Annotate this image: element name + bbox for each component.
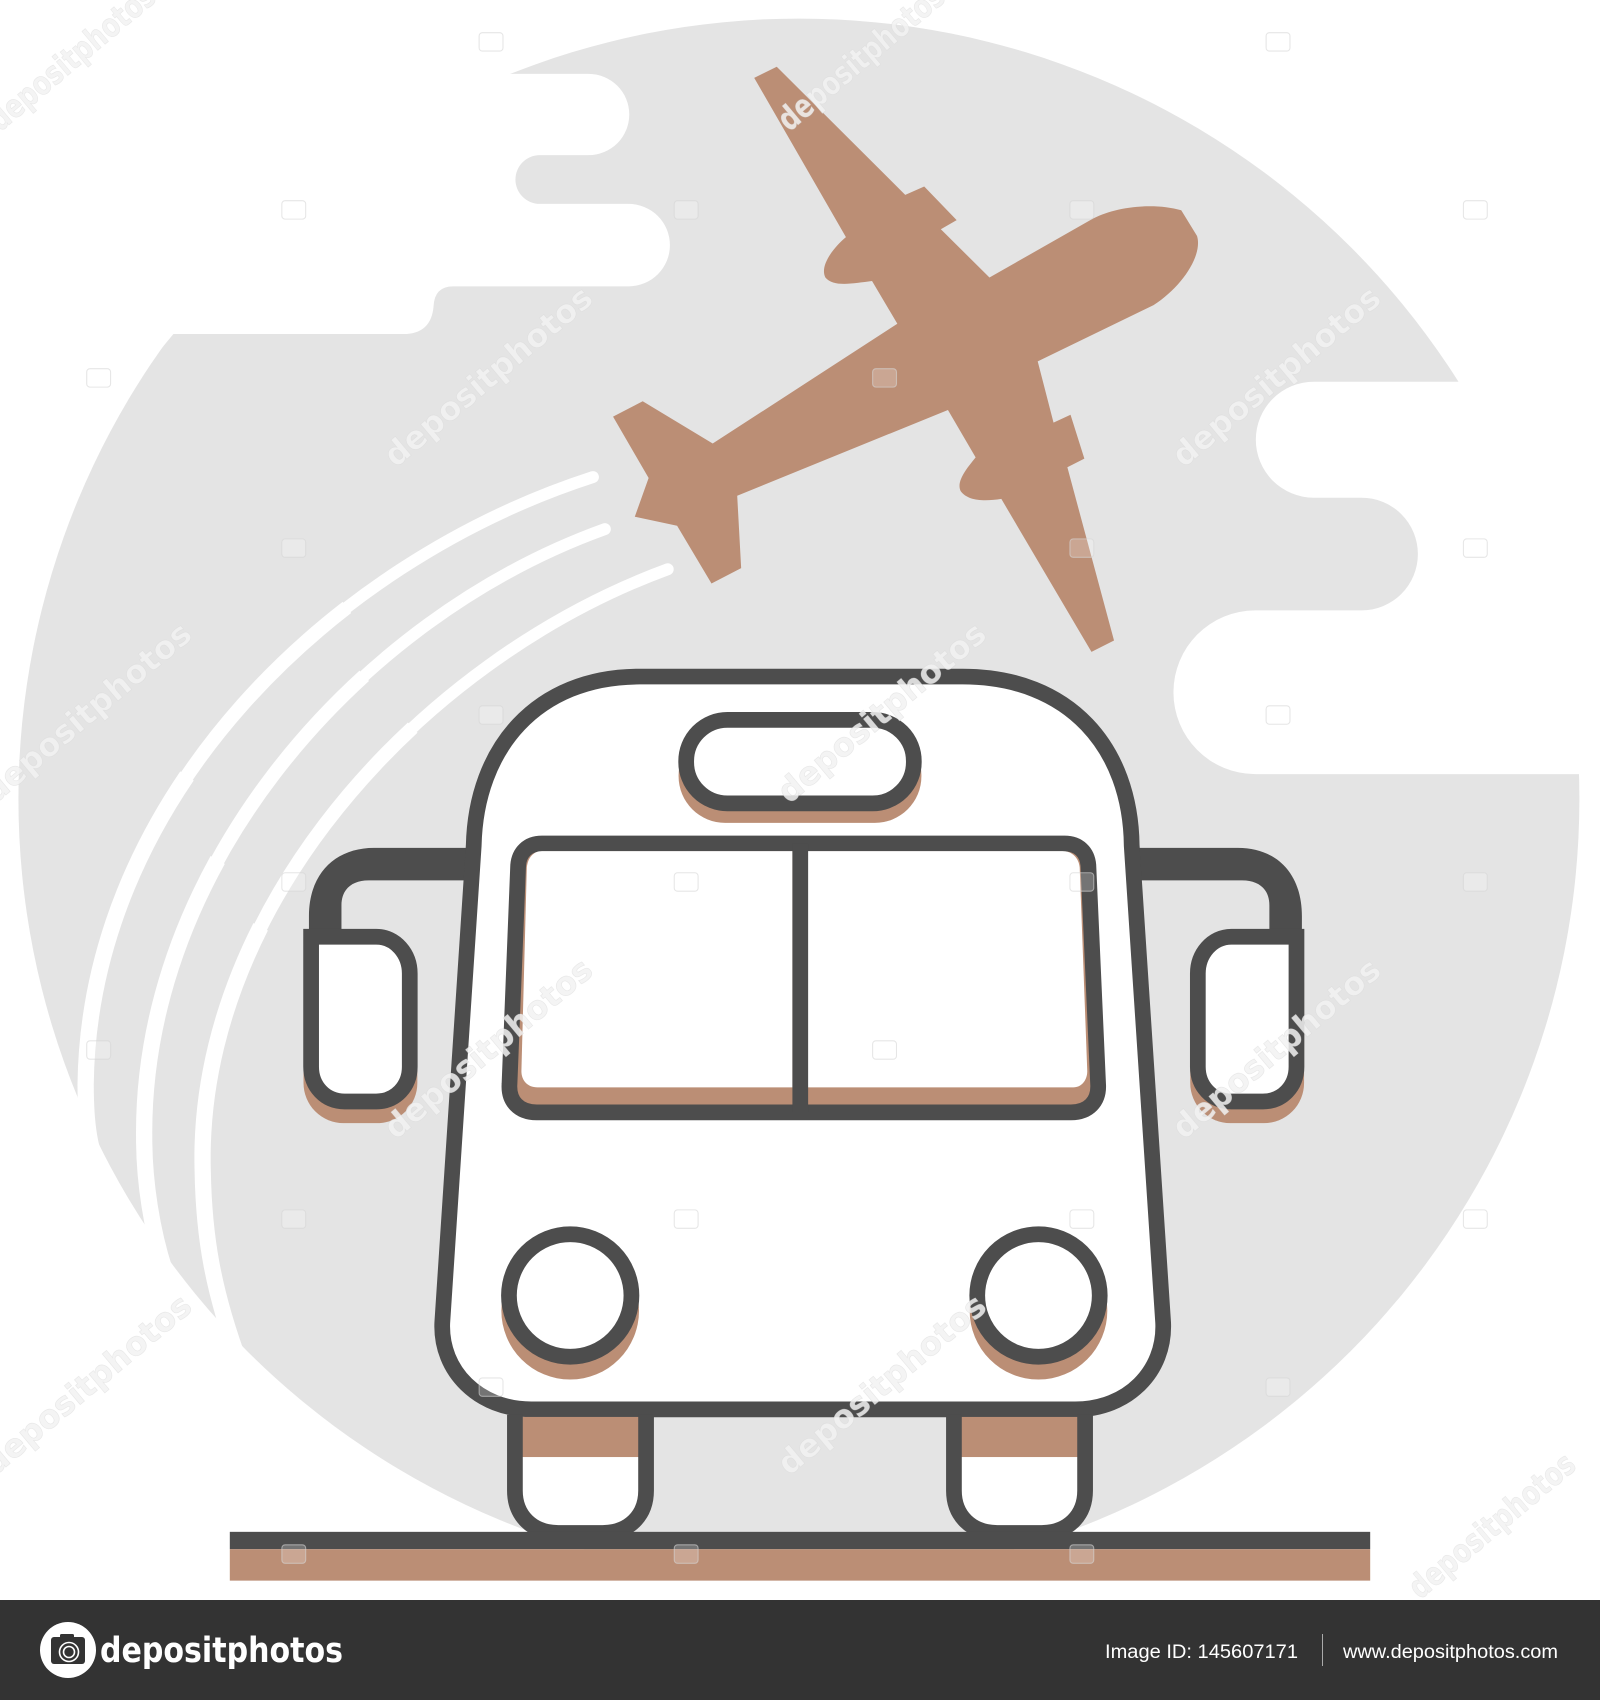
windshield <box>509 843 1098 1112</box>
cloud: top left <box>0 0 670 542</box>
logo icon: camera in circle <box>40 1622 96 1678</box>
left headlight <box>501 1234 639 1380</box>
website url: www.depositphotos.com <box>1342 1642 1558 1663</box>
left wheel <box>515 1415 646 1533</box>
right headlight <box>970 1234 1107 1380</box>
bus body <box>442 677 1163 1409</box>
airplane <box>613 67 1198 652</box>
logo wordmark: depositphotos <box>100 1631 343 1671</box>
image id: Image ID: 145607171 <box>1105 1642 1298 1663</box>
right wheel <box>954 1415 1085 1533</box>
right mirror <box>1138 848 1304 1123</box>
left mirror <box>304 848 468 1123</box>
watermark text: depositphotos <box>770 1286 994 1483</box>
cloud: right <box>1173 382 1600 774</box>
destination sign <box>679 720 921 823</box>
footer bar <box>0 1600 1600 1700</box>
watermark text: depositphotos <box>1164 278 1388 475</box>
watermark camera marks <box>87 33 1487 1563</box>
divider <box>1322 1634 1323 1666</box>
watermark text: depositphotos <box>376 950 600 1147</box>
watermark text: depositphotos <box>770 614 994 811</box>
watermark text: depositphotos <box>1164 950 1388 1147</box>
watermark text: depositphotos <box>376 278 600 475</box>
motion trails <box>86 477 668 1366</box>
ground line <box>230 1532 1370 1581</box>
